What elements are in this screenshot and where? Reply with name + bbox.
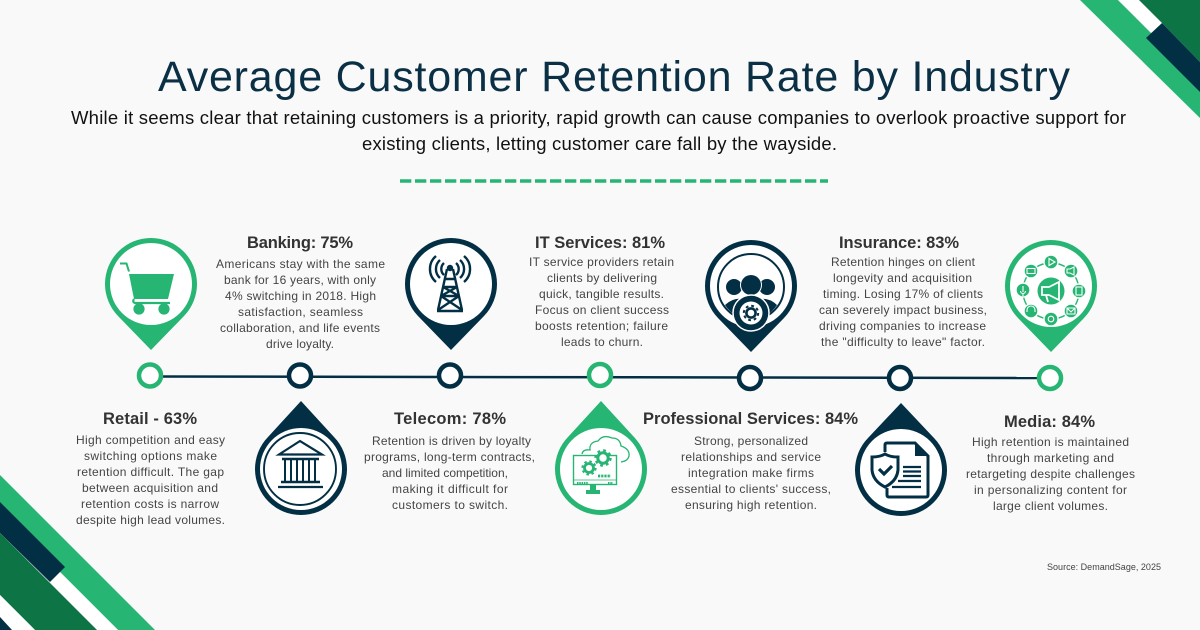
panel: Professional Services: Strong, personalized: [694, 434, 808, 448]
pin: media marketing icon: [1005, 240, 1097, 352]
panel: Banking: [216, 234, 385, 351]
panel: Telecom: programs, long-term contracts,: [364, 450, 535, 464]
panel: Retail: retention difficult. The gap: [77, 465, 224, 479]
timeline node: professional services: [739, 367, 761, 389]
subtitle: [71, 107, 1126, 154]
panel: Retail: between acquisition and: [82, 481, 218, 495]
pin: banking temple icon: [255, 401, 347, 515]
panel: Banking: drive loyalty.: [266, 337, 334, 351]
panel: Retail: switching options make: [84, 449, 217, 463]
panel: Banking: bank for 16 years, with only: [224, 273, 376, 287]
panel: IT Services: [529, 234, 674, 349]
panel: Retail: [76, 410, 225, 527]
timeline node: insurance: [889, 367, 911, 389]
panel: Professional Services: ensuring high retention.: [685, 498, 817, 512]
panel: Insurance: the "difficulty to leave" factor.: [821, 335, 985, 349]
decoration: bottom left corner stripes: [0, 475, 155, 630]
panel: Telecom: and limited competition,: [382, 466, 508, 480]
panel: Media: Media: 84%: [1004, 413, 1095, 431]
panel: IT Services: leads to churn.: [561, 335, 643, 349]
panel: Media: High retention is maintained: [972, 435, 1129, 449]
panel: Telecom: Retention is driven by loyalty: [372, 434, 531, 448]
timeline node: retail: [139, 364, 161, 386]
panel: Retail: retention costs is narrow: [81, 497, 219, 511]
panel: Insurance: driving companies to increase: [819, 319, 986, 333]
panel: Telecom: [364, 410, 535, 512]
panel: Media: in personalizing content for: [974, 483, 1127, 497]
panel: Media: through marketing and: [987, 451, 1114, 465]
subtitle: While it seems clear that retaining customers is a priority, rapid growth can cause companies to overlook proactive support for: [71, 107, 1126, 128]
panel: Insurance: Retention hinges on client: [831, 255, 976, 269]
panel: Professional Services: Professional Services: 84%: [643, 410, 858, 428]
timeline: [139, 364, 1061, 389]
panel: Media: large client volumes.: [993, 499, 1108, 513]
panel: IT Services: boosts retention; failure: [535, 319, 668, 333]
panel: IT Services: IT service providers retain: [529, 255, 674, 269]
panel: IT Services: quick, tangible results.: [539, 287, 664, 301]
panel: Media: [966, 413, 1135, 513]
timeline node: banking: [289, 364, 311, 386]
panel: Banking: Banking: 75%: [247, 234, 353, 252]
panel: Professional Services: relationships and service: [681, 450, 821, 464]
panel: Banking: collaboration, and life events: [220, 321, 380, 335]
panel: Insurance: can severely impact business,: [819, 303, 987, 317]
title: Average Customer Retention Rate by Industry: [158, 53, 1070, 101]
timeline node: IT services: [589, 364, 611, 386]
panel: Telecom: making it difficult for: [392, 482, 508, 496]
panel: Telecom: customers to switch.: [392, 498, 508, 512]
panel: Insurance: [819, 234, 987, 349]
panel: Media: retargeting despite challenges: [966, 467, 1135, 481]
panel: Insurance: Insurance: 83%: [839, 234, 959, 252]
pin: IT services cloud and monitor icon: [555, 401, 647, 515]
panel: Professional Services: essential to clients' success,: [671, 482, 831, 496]
panel: Insurance: timing. Losing 17% of clients: [823, 287, 983, 301]
panel: Banking: 4% switching in 2018. High: [225, 289, 376, 303]
panel: Telecom: Telecom: 78%: [394, 410, 506, 428]
panel: Retail: Retail - 63%: [103, 410, 197, 428]
panel: Banking: satisfaction, seamless: [238, 305, 363, 319]
panel: Professional Services: integration make firms: [688, 466, 814, 480]
panel: IT Services: IT Services: 81%: [535, 234, 665, 252]
panel: Professional Services: [643, 410, 858, 512]
panel: Insurance: longevity and acquisition: [833, 271, 972, 285]
timeline node: media: [1039, 367, 1061, 389]
source note: Source: DemandSage, 2025: [1047, 562, 1161, 572]
panel: IT Services: clients by delivering: [547, 271, 657, 285]
subtitle: existing clients, letting customer care fall by the wayside.: [362, 133, 837, 154]
timeline node: telecom: [439, 364, 461, 386]
panel: IT Services: Focus on client success: [535, 303, 669, 317]
panel: Retail: High competition and easy: [76, 433, 225, 447]
pin: telecom tower icon: [405, 238, 497, 350]
decoration: top right corner stripes: [1080, 0, 1200, 118]
pin: retail cart icon: [105, 238, 197, 350]
pin: insurance document and shield icon: [855, 403, 947, 516]
panel: Retail: despite high lead volumes.: [76, 513, 225, 527]
pin: professional services team icon: [705, 240, 797, 352]
panel: Banking: Americans stay with the same: [216, 257, 385, 271]
